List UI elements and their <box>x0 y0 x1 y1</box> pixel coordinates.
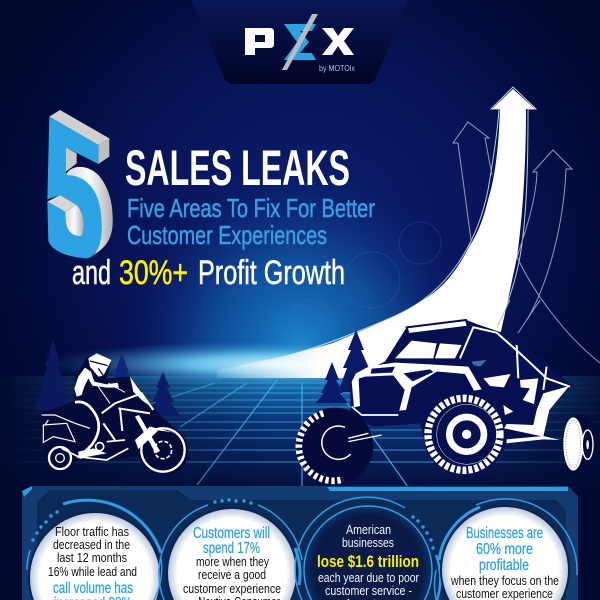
stat circle 2: customer experience <box>183 581 281 596</box>
engine and exhaust <box>62 440 128 460</box>
light bar <box>407 320 468 334</box>
windshield <box>395 341 437 358</box>
logo letter P <box>245 28 274 55</box>
horizon glow band <box>40 340 540 388</box>
stat circle 3: American <box>346 522 391 537</box>
trees in the distance <box>34 340 180 416</box>
tagline <box>72 254 345 292</box>
logo byline: by MOTOix <box>319 64 355 73</box>
title: sales leaks: SALES LEAKS <box>125 140 350 196</box>
front wheel <box>297 408 382 484</box>
icon: utv side-by-side vehicle <box>297 320 597 484</box>
panel: statistics frame <box>22 486 578 600</box>
stat circle 3: lose $1.6 trillion <box>317 552 419 571</box>
stat circle 4: when they focus on the <box>450 573 559 588</box>
middle wheel <box>423 393 507 476</box>
windshield <box>130 377 153 408</box>
stat circle 2: Customers will <box>193 525 270 542</box>
logo plate <box>192 0 408 84</box>
hood <box>352 363 482 411</box>
stat circle 2 <box>159 498 302 600</box>
rear wheel <box>563 415 597 473</box>
decorative lens rings <box>290 222 441 340</box>
subtitle line 2: Customer Experiences <box>127 220 327 250</box>
roll cage <box>460 327 570 390</box>
trees behind utv <box>316 330 374 403</box>
big 3D numeral 5 <box>47 110 113 258</box>
stat circle 1: last 12 months <box>57 550 127 565</box>
stat circle 4: 60% more <box>476 541 533 558</box>
icon: adventure motorcycle with rider <box>40 353 188 475</box>
rider leg and boot <box>75 383 125 458</box>
stat circle 4 <box>434 499 577 600</box>
stat circle 2: more when they <box>196 554 269 569</box>
cab and front end <box>352 320 570 411</box>
stat circle 2: spend 17% <box>203 540 260 557</box>
headlight accent <box>472 360 487 367</box>
stat circle 4: Businesses are <box>466 525 543 542</box>
rear wheel <box>49 447 71 469</box>
logo slash <box>282 14 318 70</box>
fork and fender <box>135 415 173 453</box>
corner accent <box>22 486 32 497</box>
subtitle line 1: Five Areas To Fix For Better <box>127 193 375 223</box>
stat circle 4: profitable <box>479 557 529 574</box>
stat circle 1: decreased in the <box>53 537 130 552</box>
pannier and rack <box>42 415 90 442</box>
fairing <box>102 393 153 440</box>
front wheel <box>141 428 185 472</box>
side panels <box>483 374 569 443</box>
bumper <box>352 407 398 415</box>
growth arrows: thin outlines <box>240 87 600 366</box>
top accent bar <box>327 487 568 491</box>
stat circle 1: 16% while lead and <box>48 564 137 579</box>
stat circle 1 <box>27 500 162 600</box>
stat circle 1: call volume has <box>53 580 133 597</box>
side window <box>435 343 462 358</box>
stat circle 3: each year due to poor <box>318 570 420 585</box>
stat circle 2: receive a good <box>198 567 266 582</box>
tagline: 30%+ <box>119 254 188 292</box>
logo sigma mark <box>284 24 316 60</box>
stat circle 1: Floor traffic has <box>55 524 129 539</box>
growth arrow: main white swoosh <box>217 89 535 378</box>
helmet <box>88 353 112 377</box>
perspective grid floor <box>0 376 600 488</box>
stat circle 3 <box>295 497 440 600</box>
logo letter X <box>322 28 354 55</box>
stat circle 3: businesses <box>342 535 394 550</box>
stat circle 3: customer service - <box>325 583 412 598</box>
tagline: Profit Growth <box>198 254 345 292</box>
tagline: and <box>72 254 111 292</box>
rider torso and arm <box>74 368 119 397</box>
